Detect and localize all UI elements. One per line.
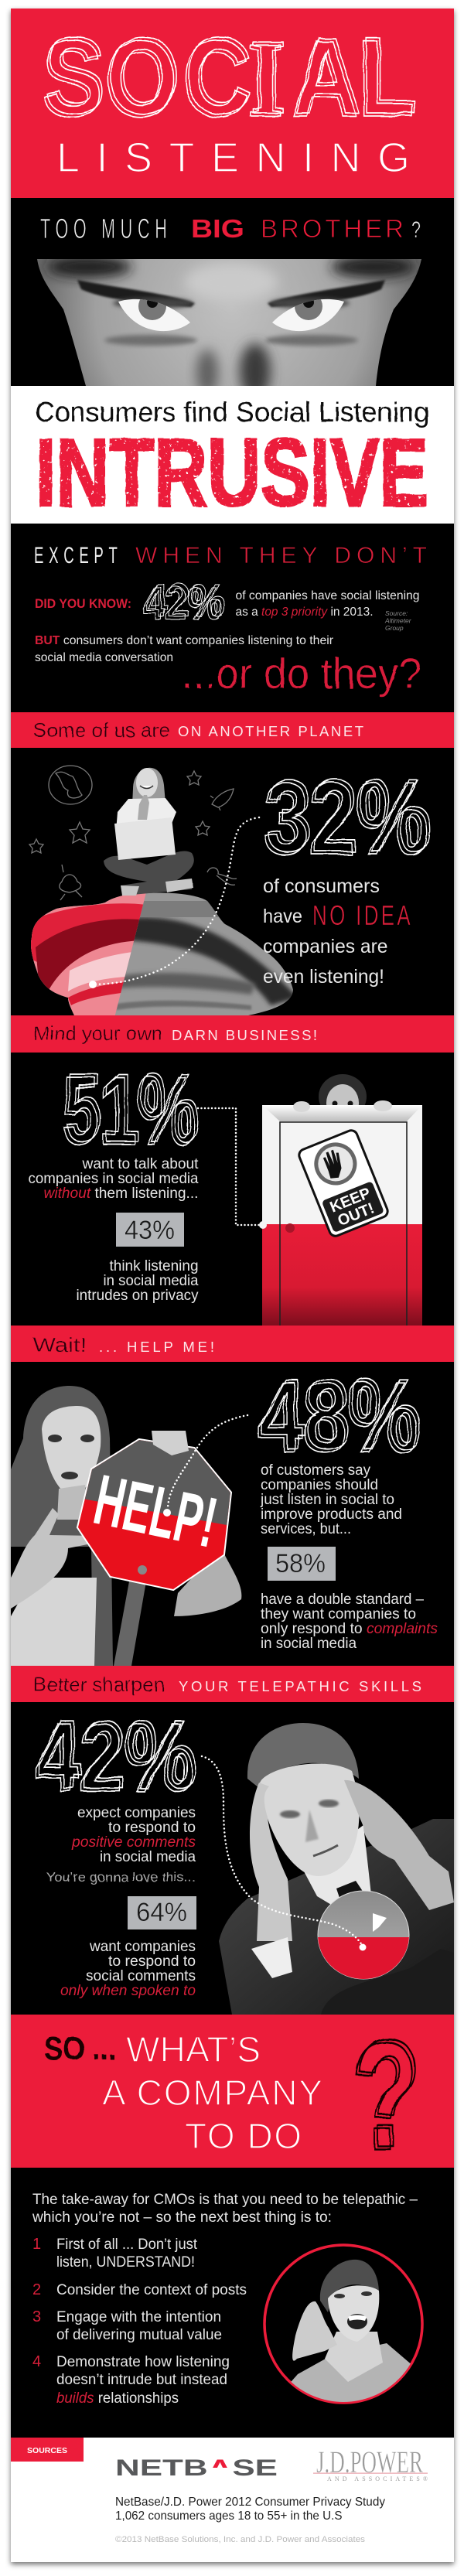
illustration: listening woman in circle	[264, 2245, 422, 2409]
stat: 51 percent: intrudes on privacy	[76, 1288, 199, 1304]
list item 2: Consider the context of posts	[56, 2282, 247, 2298]
collar	[303, 1825, 371, 1910]
did you know block: as a top 3 priority in 2013.	[235, 606, 373, 619]
heading: so what's a company to do: WHAT’S	[126, 2029, 261, 2069]
stat: 32 percent: NO IDEA	[312, 900, 411, 931]
or do they: ...or do they?	[182, 649, 421, 698]
source note	[384, 609, 412, 632]
hair	[320, 2260, 379, 2312]
did you know block: DID YOU KNOW:	[35, 596, 131, 611]
face	[136, 768, 158, 797]
icon: question mark: ?	[354, 2008, 421, 2179]
stat: 42 percent: 42%	[37, 1701, 197, 1809]
illustration: man with crystal ball	[219, 1723, 454, 2015]
logo: j.d. power: AND ASSOCIATES®	[327, 2475, 428, 2482]
heading: too much big brother	[40, 213, 421, 244]
heading: too much big brother: ?	[411, 217, 421, 243]
heading: too much big brother: BIG	[191, 214, 244, 243]
stat: 48 percent: in social media	[261, 1636, 357, 1652]
sources panel: SOURCES	[27, 2446, 67, 2455]
list item 4	[32, 2353, 230, 2407]
band: darn business	[33, 1022, 317, 1045]
illustration: door with keep out sign	[262, 1074, 422, 1326]
stop sign	[78, 1440, 230, 1589]
stat: 32 percent: companies are	[263, 936, 388, 957]
right hand	[344, 1780, 454, 1910]
band: telepathic skills: YOUR TELEPATHIC SKILLS	[179, 1678, 421, 1694]
takeaway text: The take-away for CMOs is that you need to be telepathic –	[32, 2192, 418, 2208]
crystal ball	[318, 1891, 409, 1979]
legs	[104, 851, 194, 896]
neck	[325, 2332, 383, 2382]
keep out sign: KEEP	[328, 1185, 373, 1216]
list item 1: 1	[32, 2236, 41, 2253]
stat: 42 percent	[37, 1701, 197, 1999]
hair	[11, 1386, 113, 1666]
stat: 48 percent: of customers say	[261, 1462, 370, 1479]
heading: except when they don't: EXCEPT	[34, 543, 118, 568]
did you know block: of companies have social listening	[235, 589, 419, 602]
keep out sign: OUT!	[336, 1199, 377, 1230]
face	[260, 1764, 359, 1876]
stat: 48 percent: improve products and	[261, 1506, 402, 1523]
aside: You’re gonna love this...	[46, 1870, 196, 1885]
stat: 42 percent: positive comments	[71, 1834, 196, 1851]
band: darn business: Mind your own	[33, 1022, 162, 1045]
stat: 32 percent: have	[263, 906, 302, 927]
stat: 42 percent: social comments	[86, 1968, 196, 1984]
stat: 42 percent: expect companies	[77, 1805, 196, 1821]
list item 1	[32, 2236, 198, 2271]
headline: consumers find social listening intrusive: Consumers find Social Listening	[35, 396, 429, 428]
dotted connector: crystal ball	[202, 1756, 367, 1950]
stat: 48 percent	[260, 1359, 438, 1652]
stat: 42 percent: only when spoken to	[60, 1983, 196, 1999]
logo: netbase: NETB A SE	[115, 2455, 278, 2481]
stat: 42%: 42%	[145, 575, 226, 626]
stat box: 43%	[116, 1213, 184, 1247]
stat: 42 percent: want companies	[89, 1939, 196, 1955]
stat: 42 percent: to respond to	[108, 1820, 196, 1836]
logo: j.d. power	[313, 2445, 428, 2482]
stat: 48 percent: only respond to complaints	[261, 1621, 438, 1637]
did you know block: social media conversation	[35, 651, 173, 664]
far arm	[174, 1555, 241, 1616]
keep out sign	[297, 1128, 390, 1238]
stat box: 58%: 58%	[275, 1549, 326, 1578]
stat box: 64%: 64%	[136, 1898, 187, 1927]
band: on another planet	[33, 718, 363, 742]
sources panel	[11, 2438, 428, 2544]
dotted connector: planet	[89, 817, 259, 988]
stat: 51 percent: companies in social media	[28, 1171, 199, 1187]
takeaway text: which you’re not – so the next best thing is to:	[32, 2209, 332, 2226]
band: on another planet: Some of us are	[33, 718, 170, 742]
band: telepathic skills: Better sharpen	[33, 1673, 165, 1696]
takeaway text	[32, 2192, 418, 2407]
stat: 51 percent: want to talk about	[81, 1156, 199, 1172]
band: on another planet: ON ANOTHER PLANET	[178, 723, 363, 739]
laptop	[114, 817, 176, 860]
source note: Source:	[385, 609, 408, 617]
sources panel: NetBase/J.D. Power 2012 Consumer Privacy Study	[115, 2496, 385, 2509]
stat: 51 percent	[28, 1053, 200, 1304]
doodles: space	[29, 766, 237, 900]
heading: so what's a company to do	[44, 2008, 421, 2179]
illustration: girl with laptop on planet	[23, 768, 302, 1021]
band: darn business: DARN BUSINESS!	[172, 1027, 317, 1043]
right eye	[272, 299, 344, 331]
list item 3: Engage with the intention	[56, 2309, 221, 2325]
sign text: HELP!	[87, 1460, 223, 1563]
stat: 51 percent: think listening	[110, 1258, 198, 1274]
planet red section	[31, 893, 145, 1015]
heading: too much big brother: BROTHER	[261, 214, 404, 243]
velvet cloth	[322, 1981, 369, 2015]
pointing hand	[11, 1508, 88, 1609]
band: help me: ... HELP ME!	[99, 1339, 214, 1355]
stat: 51 percent: in social media	[104, 1273, 199, 1289]
peeking girl	[319, 1074, 367, 1105]
title	[44, 15, 418, 181]
stat: 48 percent: they want companies to	[261, 1606, 416, 1622]
band: telepathic skills	[33, 1673, 421, 1696]
stat: 32 percent	[263, 759, 432, 988]
list item 3	[32, 2308, 222, 2343]
hand	[292, 2301, 337, 2361]
hair	[131, 768, 167, 821]
dotted connector: help	[163, 1415, 247, 1517]
source note: Group	[385, 624, 404, 632]
suit	[219, 1819, 454, 2015]
stat: 32 percent: of consumers	[263, 875, 380, 897]
dotted connector: door	[198, 1108, 267, 1229]
did you know block	[35, 575, 421, 698]
stat: 48 percent: 48%	[261, 1359, 421, 1470]
face	[42, 1406, 101, 1489]
stat: 51 percent: without them listening...	[43, 1186, 198, 1202]
did you know block: BUT consumers don’t want companies listening to their	[35, 634, 333, 647]
list item 3: of delivering mutual value	[56, 2327, 222, 2343]
list item 4: 4	[32, 2353, 41, 2370]
stat box: 64%	[128, 1896, 196, 1929]
stat: 42 percent: to respond to	[108, 1953, 196, 1970]
hand	[138, 795, 149, 820]
title line: social: SOCIAL	[44, 15, 418, 137]
holding hand	[152, 1431, 189, 1455]
stat: 48 percent: just listen in social to	[260, 1492, 394, 1508]
stat: 48 percent: companies should	[261, 1477, 378, 1493]
sources panel: 1,062 consumers ages 18 to 55+ in the U.S	[115, 2509, 342, 2523]
illustration: woman with help sign	[11, 1386, 241, 1666]
heading: too much big brother: TOO MUCH	[40, 213, 167, 244]
photo: staring eyes	[37, 259, 421, 386]
heading: so what's a company to do: TO DO	[185, 2116, 302, 2156]
stat: 51 percent: 51%	[65, 1053, 200, 1162]
list item 3: 3	[32, 2308, 41, 2325]
list item 1: listen, UNDERSTAND!	[56, 2254, 195, 2271]
stat box: 43%: 43%	[125, 1216, 175, 1245]
stat: 48 percent: services, but...	[261, 1521, 351, 1537]
heading: so what's a company to do: A COMPANY	[102, 2073, 322, 2113]
list item 4: Demonstrate how listening	[56, 2354, 230, 2370]
shirt	[291, 2343, 411, 2402]
shirt	[116, 798, 176, 831]
stat box: 58%	[268, 1547, 336, 1581]
list item 2: 2	[32, 2281, 41, 2298]
copyright: ©2013 NetBase Solutions, Inc. and J.D. Power and Associates	[115, 2535, 366, 2544]
left hand	[250, 1783, 292, 1941]
hair	[247, 1723, 359, 1788]
band: help me	[33, 1333, 214, 1356]
source note: Altimeter	[384, 617, 412, 625]
post	[114, 1581, 146, 1666]
list item 4: builds relationships	[56, 2390, 179, 2407]
left eye	[118, 299, 190, 331]
title line: listening: LISTENING	[56, 135, 410, 181]
stat: 42 percent: in social media	[100, 1849, 196, 1865]
list item 4: doesn’t intrude but instead	[56, 2372, 227, 2388]
list item 1: First of all ... Don’t just	[56, 2237, 198, 2253]
face	[328, 2285, 379, 2342]
stat: 48 percent: have a double standard –	[261, 1592, 424, 1608]
heading: so what's a company to do: SO ...	[44, 2030, 116, 2066]
stat: 32 percent: even listening!	[263, 966, 384, 988]
heading: except when they don't: WHEN THEY DON’T	[135, 543, 427, 568]
torso	[11, 1578, 97, 1666]
band: help me: Wait!	[33, 1333, 87, 1356]
planet	[31, 892, 293, 1015]
